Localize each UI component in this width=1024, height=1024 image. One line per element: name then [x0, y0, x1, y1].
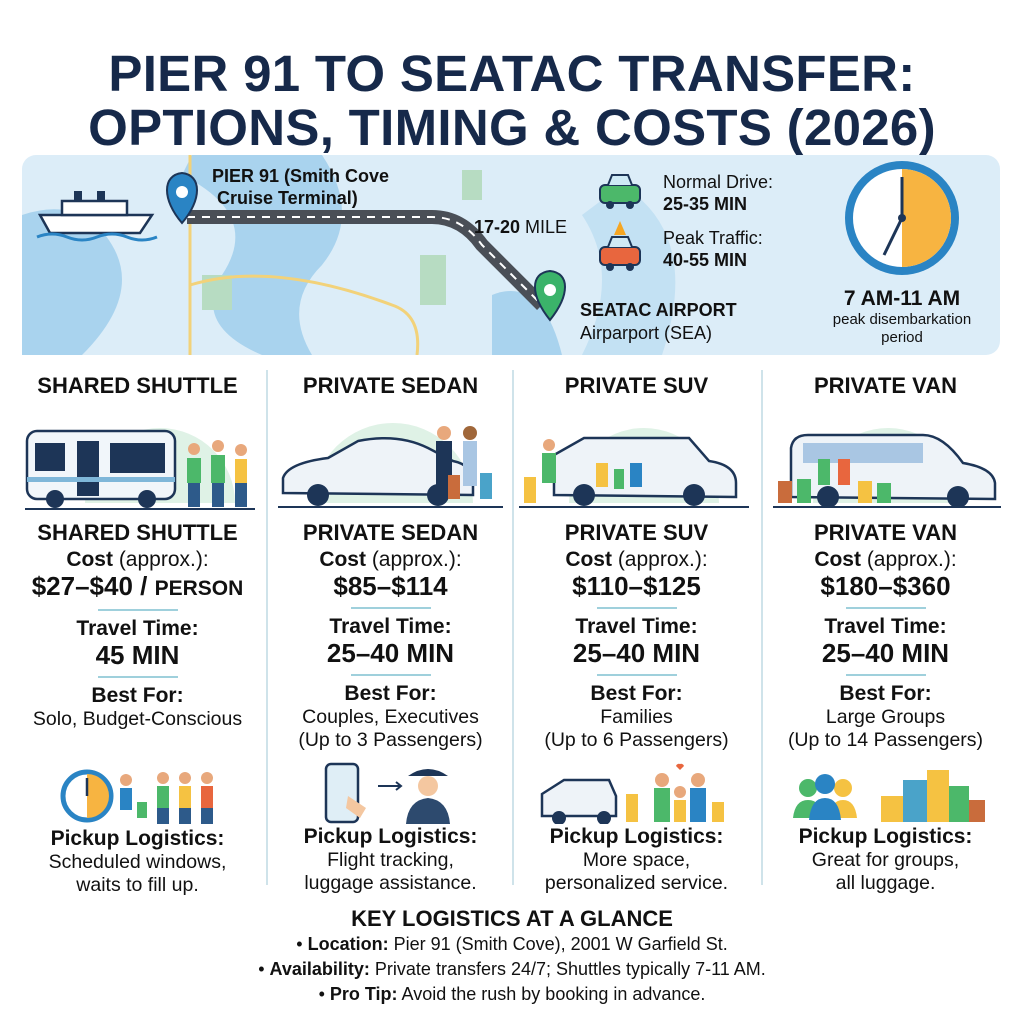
panel: shared shuttle: Cost (approx.):: [66, 548, 209, 571]
panel: private van: $180–$360: [820, 571, 951, 601]
text: peak traffic: 40-55 MIN: [663, 250, 747, 270]
panel: private sedan: Best For:: [344, 682, 437, 705]
icon: pin pier 91: [167, 173, 197, 223]
panel: private van: all luggage.: [836, 872, 935, 894]
panel: private suv: More space,: [583, 849, 690, 871]
panel: shared shuttle: Scheduled windows,: [49, 851, 226, 873]
panel: private sedan: 25–40 MIN: [327, 638, 454, 668]
icon: red car: [600, 221, 640, 271]
text: pier 91: [212, 166, 389, 208]
title: PIER 91 TO SEATAC TRANSFER:: [108, 45, 916, 102]
panel: private van: Great for groups,: [812, 849, 959, 871]
panel: private suv: Cost (approx.):: [565, 548, 708, 571]
illustration: sedan: [278, 423, 503, 508]
key logistics: KEY LOGISTICS AT A GLANCE: [351, 906, 673, 931]
text: seatac: Airparport (SEA): [580, 323, 712, 343]
panel: private suv: Families: [600, 706, 673, 728]
panel: private suv: PRIVATE SUV: [565, 373, 708, 398]
text: normal drive: 25-35 MIN: [663, 194, 747, 214]
panel: shared shuttle: $27–$40 / PERSON: [32, 571, 243, 601]
panel: private sedan: Pickup Logistics:: [304, 825, 477, 848]
panel: shared shuttle: 45 MIN: [96, 640, 179, 670]
panel: shared shuttle: Best For:: [91, 684, 184, 707]
panel: shared shuttle: Pickup Logistics:: [51, 827, 224, 850]
illustration: bus: [25, 428, 255, 510]
text: peak period: 7 AM-11 AM: [844, 287, 960, 310]
panel: private suv: Travel Time:: [575, 615, 698, 638]
panel: private suv: (Up to 6 Passengers): [544, 729, 729, 751]
panel: private van: Travel Time:: [824, 615, 947, 638]
panel: private van: Large Groups: [826, 706, 945, 728]
panel: private sedan: Travel Time:: [329, 615, 452, 638]
text: pier 91: Cruise Terminal): [217, 188, 358, 208]
title: [88, 45, 936, 156]
icon: cruise ship: [37, 191, 157, 240]
text: peak period: [833, 287, 971, 346]
panel: private van: 25–40 MIN: [822, 638, 949, 668]
panel: private sedan: Cost (approx.):: [319, 548, 462, 571]
text: peak traffic: Peak Traffic:: [663, 228, 763, 248]
text: seatac: SEATAC AIRPORT: [580, 300, 737, 320]
panel: private van: Cost (approx.):: [814, 548, 957, 571]
text: normal drive: [663, 172, 773, 214]
text: seatac: [580, 300, 737, 343]
panel: private van: Best For:: [839, 682, 932, 705]
key logistics: [258, 906, 766, 1004]
text: peak period: period: [881, 329, 923, 346]
panel: shared shuttle: Solo, Budget-Conscious: [33, 708, 242, 730]
panel: private sedan: $85–$114: [333, 571, 448, 601]
key logistics: • Pro Tip: Avoid the rush by booking in advance.: [319, 984, 705, 1004]
icon: green car: [600, 175, 640, 209]
icon: pin seatac: [535, 271, 565, 320]
panel: shared shuttle: waits to fill up.: [76, 874, 199, 896]
panel: shared shuttle: SHARED SHUTTLE: [37, 520, 238, 545]
panel: private sedan: PRIVATE SEDAN: [303, 373, 478, 398]
title: OPTIONS, TIMING & COSTS (2026): [88, 99, 936, 156]
illustration: van: [773, 428, 1001, 508]
panel: shared shuttle: Travel Time:: [76, 617, 199, 640]
icon: clock: [845, 161, 959, 275]
panel: private sedan: Couples, Executives: [302, 706, 479, 728]
panel: private sedan: luggage assistance.: [304, 872, 477, 894]
panel: private sedan: Flight tracking,: [327, 849, 454, 871]
panel: private sedan: PRIVATE SEDAN: [303, 520, 478, 545]
panel: shared shuttle: SHARED SHUTTLE: [37, 373, 238, 398]
panel: shared shuttle: [25, 373, 255, 896]
text: pier 91: PIER 91 (Smith Cove: [212, 166, 389, 186]
panel: private suv: $110–$125: [572, 571, 701, 601]
icon: clock and queue: [60, 770, 213, 824]
panel: private suv: [519, 373, 749, 894]
key logistics: • Location: Pier 91 (Smith Cove), 2001 W Garfield St.: [296, 934, 728, 954]
icon: phone and chauffeur: [324, 762, 450, 824]
text: peak period: peak disembarkation: [833, 311, 971, 328]
text: normal drive: Normal Drive:: [663, 172, 773, 192]
panel: private van: PRIVATE VAN: [814, 520, 957, 545]
panel: private suv: 25–40 MIN: [573, 638, 700, 668]
text: distance: 17-20 MILE: [474, 217, 567, 237]
road: [187, 217, 542, 305]
panel: private sedan: (Up to 3 Passengers): [298, 729, 483, 751]
key logistics: • Availability: Private transfers 24/7; Shuttles typically 7-11 AM.: [258, 959, 766, 979]
panel: private suv: personalized service.: [545, 872, 728, 894]
panel: private van: [773, 373, 1001, 894]
panel: private sedan: [278, 373, 503, 894]
panel: private van: Pickup Logistics:: [799, 825, 972, 848]
panel: private suv: Best For:: [590, 682, 683, 705]
panel: private suv: Pickup Logistics:: [550, 825, 723, 848]
illustration: suv: [519, 428, 749, 508]
panel: private suv: PRIVATE SUV: [565, 520, 708, 545]
panel: route map: [22, 155, 1000, 355]
text: peak traffic: [663, 228, 763, 270]
icon: suv trunk and family: [540, 764, 724, 824]
panel: private van: (Up to 14 Passengers): [788, 729, 983, 751]
panel: private van: PRIVATE VAN: [814, 373, 957, 398]
icon: group and luggage: [793, 770, 985, 822]
